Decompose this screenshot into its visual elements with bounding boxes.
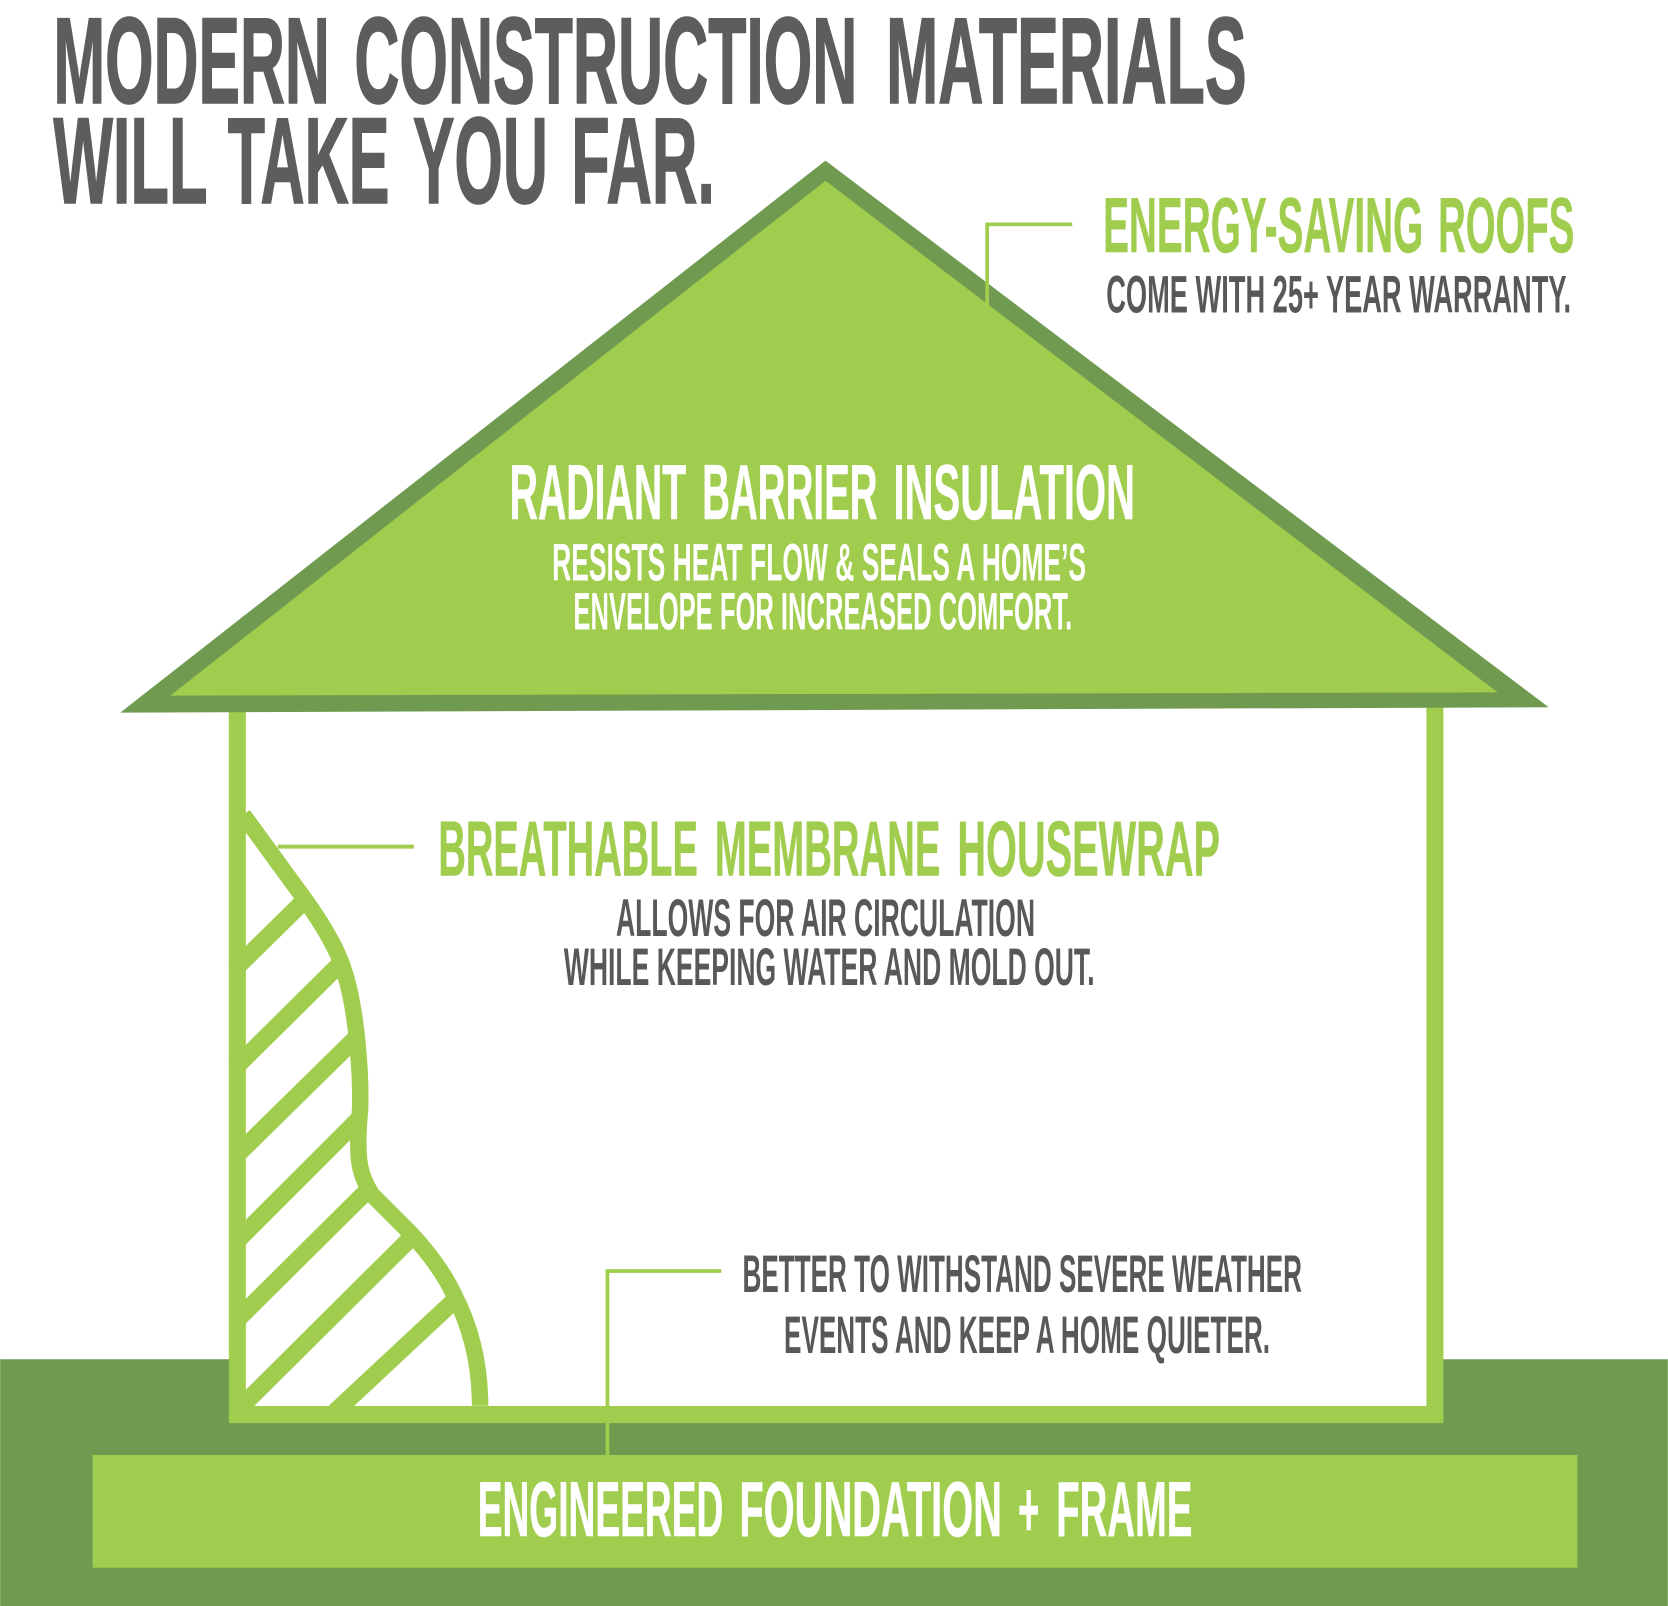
foundation bar	[93, 1455, 1577, 1568]
foundation label: +	[1018, 1467, 1039, 1553]
text block: breathable membrane housewrap: WHILE KEEPING WATER AND MOLD OUT.	[564, 938, 1095, 997]
text block: breathable membrane housewrap: ALLOWS FOR AIR CIRCULATION	[616, 889, 1035, 948]
text block: radiant barrier insulation: BARRIER	[702, 450, 878, 536]
infographic canvas: FRAME	[1056, 1467, 1192, 1553]
house walls	[237, 702, 1435, 1415]
text block: breathable membrane housewrap	[438, 806, 1220, 997]
callout connector: roofs	[987, 224, 1072, 308]
text block: breathable membrane housewrap: HOUSEWRAP	[957, 806, 1220, 892]
title: YOU	[413, 92, 548, 229]
title: FAR.	[571, 92, 715, 229]
roof outer edge	[120, 161, 1549, 713]
text block: severe weather	[743, 1245, 1302, 1365]
title: WILL	[53, 92, 208, 229]
callout connector: foundation	[607, 1271, 721, 1455]
title: TAKE	[228, 92, 389, 229]
ground band	[0, 1359, 1668, 1606]
text block: breathable membrane housewrap: BREATHABLE	[438, 806, 698, 892]
text block: breathable membrane housewrap: MEMBRANE	[715, 806, 940, 892]
text block: radiant barrier insulation: RESISTS HEAT FLOW & SEALS A HOME’S	[552, 534, 1086, 593]
title	[53, 0, 1247, 229]
text block: radiant barrier insulation: INSULATION	[894, 450, 1135, 536]
foundation label: ENGINEERED	[478, 1467, 723, 1553]
foundation label: FOUNDATION	[739, 1467, 1002, 1553]
text block: radiant barrier insulation	[510, 450, 1135, 642]
roof	[120, 161, 1549, 713]
housewrap hatched illustration	[237, 815, 480, 1412]
text block: radiant barrier insulation: RADIANT	[510, 450, 686, 536]
callout connector: housewrap	[278, 845, 414, 848]
callout: energy-saving roofs	[1103, 183, 1574, 325]
text block: radiant barrier insulation: ENVELOPE FOR INCREASED COMFORT.	[573, 583, 1072, 642]
roof inner fill	[170, 181, 1498, 696]
